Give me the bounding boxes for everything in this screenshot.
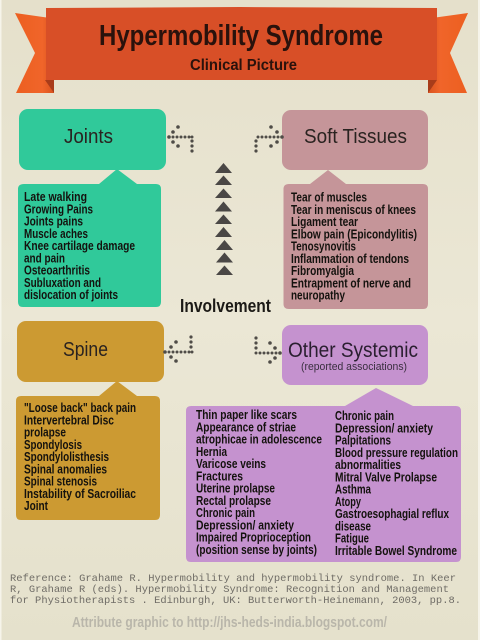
panel: joints heading — [19, 109, 166, 170]
right column of symptoms: Fatigue — [335, 532, 369, 546]
panel: joints list: and pain — [24, 251, 65, 265]
panel: spine list: "Loose back" back pain — [24, 401, 136, 415]
attribution line: Attribute graphic to http://jhs-heds-india.blogspot.com/ — [72, 614, 388, 631]
right column of symptoms: Asthma — [335, 483, 372, 497]
panel: soft tissues list: Tenosynovitis — [291, 240, 356, 254]
panel: soft tissues heading: Soft Tissues — [304, 126, 407, 148]
panel: other systemic heading — [282, 325, 428, 385]
panel: joints list: dislocation of joints — [24, 288, 118, 302]
arrow: dotted to spine — [163, 335, 194, 363]
right column of symptoms: abnormalities — [335, 458, 401, 472]
right column of symptoms — [335, 409, 458, 558]
subtitle: Clinical Picture — [190, 57, 297, 74]
left column of symptoms: Chronic pain — [196, 506, 255, 520]
title: Hypermobility Syndrome — [99, 20, 383, 52]
panel: soft tissues list: Elbow pain (Epicondylitis) — [291, 227, 417, 241]
panel: other systemic list — [186, 388, 461, 562]
reference text: R, Grahame R (eds). Hypermobility Syndrome: Recognition and Management — [10, 584, 449, 596]
panel: spine list: Joint — [24, 499, 49, 513]
left column of symptoms: Fractures — [196, 469, 243, 483]
left column of symptoms: Appearance of striae — [196, 420, 296, 434]
panel: soft tissues list: Tear in meniscus of knees — [291, 203, 416, 217]
left column of symptoms: Rectal prolapse — [196, 494, 271, 508]
panel: soft tissues list: Inflammation of tendons — [291, 252, 409, 266]
panel: joints list: Growing Pains — [24, 202, 93, 216]
panel: spine list: Spondylolisthesis — [24, 450, 109, 464]
panel: soft tissues list: Ligament tear — [291, 215, 358, 229]
left column of symptoms: Depression/ anxiety — [196, 518, 294, 532]
panel: joints list: Osteoarthritis — [24, 264, 90, 278]
panel: soft tissues list: neuropathy — [291, 288, 345, 302]
right column of symptoms: Atopy — [335, 495, 361, 509]
panel: joints list: Muscle aches — [24, 227, 88, 241]
panel: other systemic heading: (reported associations) — [301, 361, 407, 373]
panel: soft tissues list: Entrapment of nerve and — [291, 276, 411, 290]
arrow: dotted to joints — [167, 125, 194, 153]
right column of symptoms: Palpitations — [335, 434, 391, 448]
reference text — [10, 573, 461, 607]
title banner — [15, 7, 468, 93]
panel: spine list: Spondylosis — [24, 438, 82, 452]
panel: spine list: prolapse — [24, 426, 66, 440]
right column of symptoms: disease — [335, 520, 371, 534]
left column of symptoms: Uterine prolapse — [196, 482, 275, 496]
arrow: dotted to other systemic — [254, 336, 282, 364]
panel: spine heading — [17, 321, 164, 382]
panel: soft tissues list: Tear of muscles — [291, 190, 367, 204]
arrow: column of upward triangles — [215, 163, 233, 275]
panel: joints list: Late walking — [24, 190, 87, 204]
panel: joints list — [18, 169, 161, 307]
right column of symptoms: Gastroesophagial reflux — [335, 507, 449, 521]
central label: involvement: Involvement — [180, 296, 271, 316]
panel: soft tissues list — [284, 170, 428, 309]
panel: joints list: Knee cartilage damage — [24, 239, 135, 253]
panel: joints heading: Joints — [64, 126, 113, 148]
panel: spine list — [16, 381, 160, 520]
panel: soft tissues list: Fibromyalgia — [291, 264, 355, 278]
panel: soft tissues heading — [282, 110, 428, 170]
right column of symptoms: Chronic pain — [335, 409, 394, 423]
left column of symptoms: Impaired Proprioception — [196, 531, 311, 545]
left column of symptoms: Varicose veins — [196, 457, 266, 471]
left column of symptoms: (position sense by joints) — [196, 543, 317, 557]
panel: spine list: Instability of Sacroiliac — [24, 487, 136, 501]
arrow: dotted to soft tissues — [254, 125, 284, 153]
panel: spine heading: Spine — [63, 339, 108, 361]
panel: spine list: Spinal stenosis — [24, 474, 97, 488]
right column of symptoms: Mitral Valve Prolapse — [335, 470, 437, 484]
left column of symptoms: atrophicae in adolescence — [196, 432, 322, 446]
reference text: for Physiotherapists . Edinburgh, UK: Butterworth-Heinemann, 2003, pp.8. — [10, 595, 461, 607]
left column of symptoms: Hernia — [196, 445, 228, 459]
panel: joints list: Joints pains — [24, 214, 83, 228]
panel: other systemic heading: Other Systemic — [288, 339, 418, 362]
panel: joints list: Subluxation and — [24, 276, 101, 290]
panel: spine list: Spinal anomalies — [24, 462, 107, 476]
left column of symptoms: Thin paper like scars — [196, 408, 297, 422]
left column of symptoms — [196, 408, 322, 557]
right column of symptoms: Depression/ anxiety — [335, 421, 433, 435]
reference text: Reference: Grahame R. Hypermobility and hypermobility syndrome. In Keer — [10, 573, 456, 585]
panel: spine list: Intervertebral Disc — [24, 413, 114, 427]
